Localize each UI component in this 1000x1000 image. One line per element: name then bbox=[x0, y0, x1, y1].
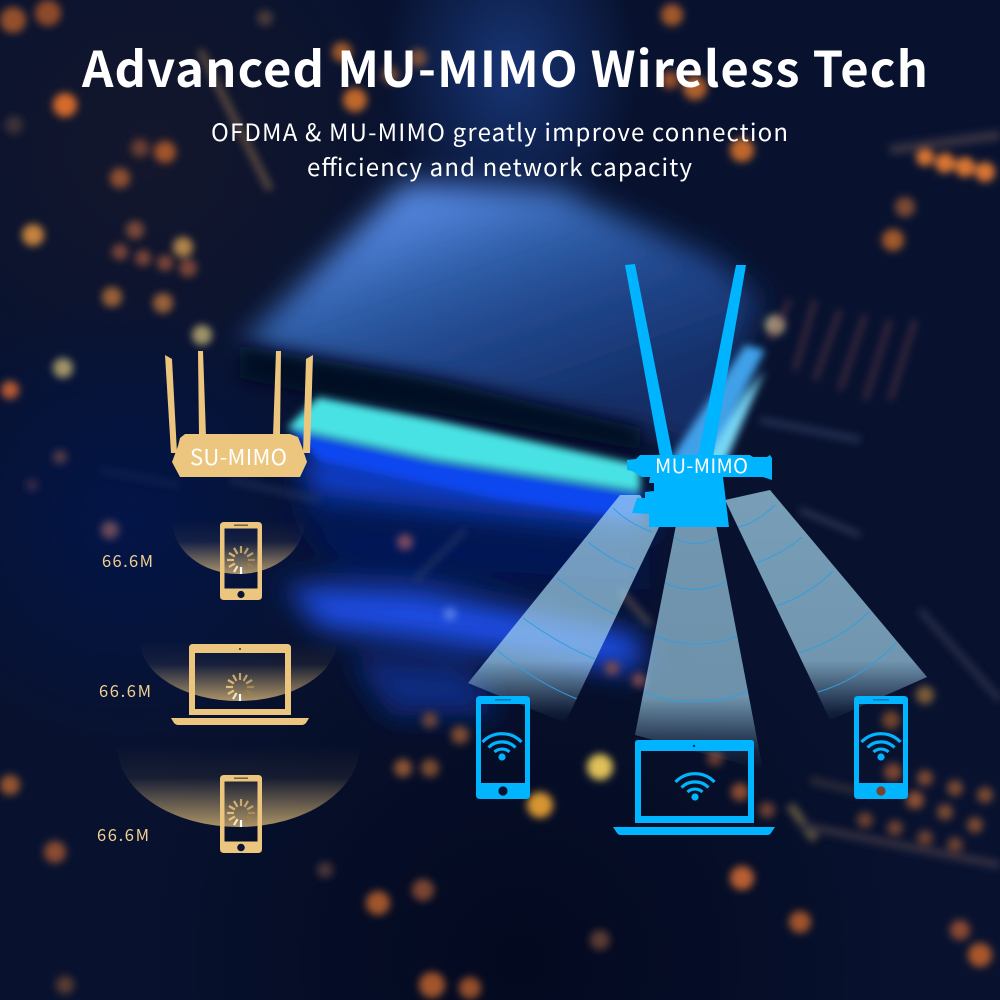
label: phone 1 speed: 66.6M bbox=[102, 548, 153, 572]
dim red grid, upper right bbox=[770, 300, 915, 400]
icon: SU-MIMO router: SU-MIMO bbox=[190, 440, 287, 472]
label: phone 2 speed: 66.6M bbox=[97, 822, 149, 846]
signal dome 2 bbox=[140, 640, 337, 701]
beam: left bbox=[468, 495, 660, 723]
icon: MU-MIMO adapter bbox=[625, 264, 772, 527]
traces bbox=[100, 50, 1000, 865]
panel: SU-MIMO side bbox=[97, 351, 360, 853]
icon: right phone bbox=[854, 696, 908, 799]
icon: laptop with spinner bbox=[171, 644, 309, 725]
beam arcs bbox=[497, 505, 896, 702]
panel: MU-MIMO side bbox=[468, 264, 927, 835]
title: Advanced MU-MIMO Wireless Tech bbox=[81, 31, 928, 102]
beam: center bbox=[635, 525, 763, 770]
chip bbox=[240, 182, 760, 455]
icon: phone 1 with spinner bbox=[220, 522, 262, 600]
subtitle: OFDMA & MU-MIMO greatly improve connection bbox=[211, 113, 788, 148]
signal dome 1 bbox=[172, 520, 305, 574]
icon: MU-MIMO adapter: MU-MIMO bbox=[655, 450, 748, 479]
label: laptop speed: 66.6M bbox=[99, 678, 151, 702]
icon: center laptop bbox=[613, 740, 775, 835]
signal dome 3 bbox=[117, 745, 360, 827]
icon: SU-MIMO router bbox=[165, 351, 313, 477]
beam: right bbox=[725, 490, 927, 720]
icon: phone 2 with spinner bbox=[220, 775, 262, 853]
subtitle: efficiency and network capacity bbox=[307, 148, 692, 183]
subtitle bbox=[211, 113, 788, 183]
icon: left phone bbox=[476, 696, 530, 799]
